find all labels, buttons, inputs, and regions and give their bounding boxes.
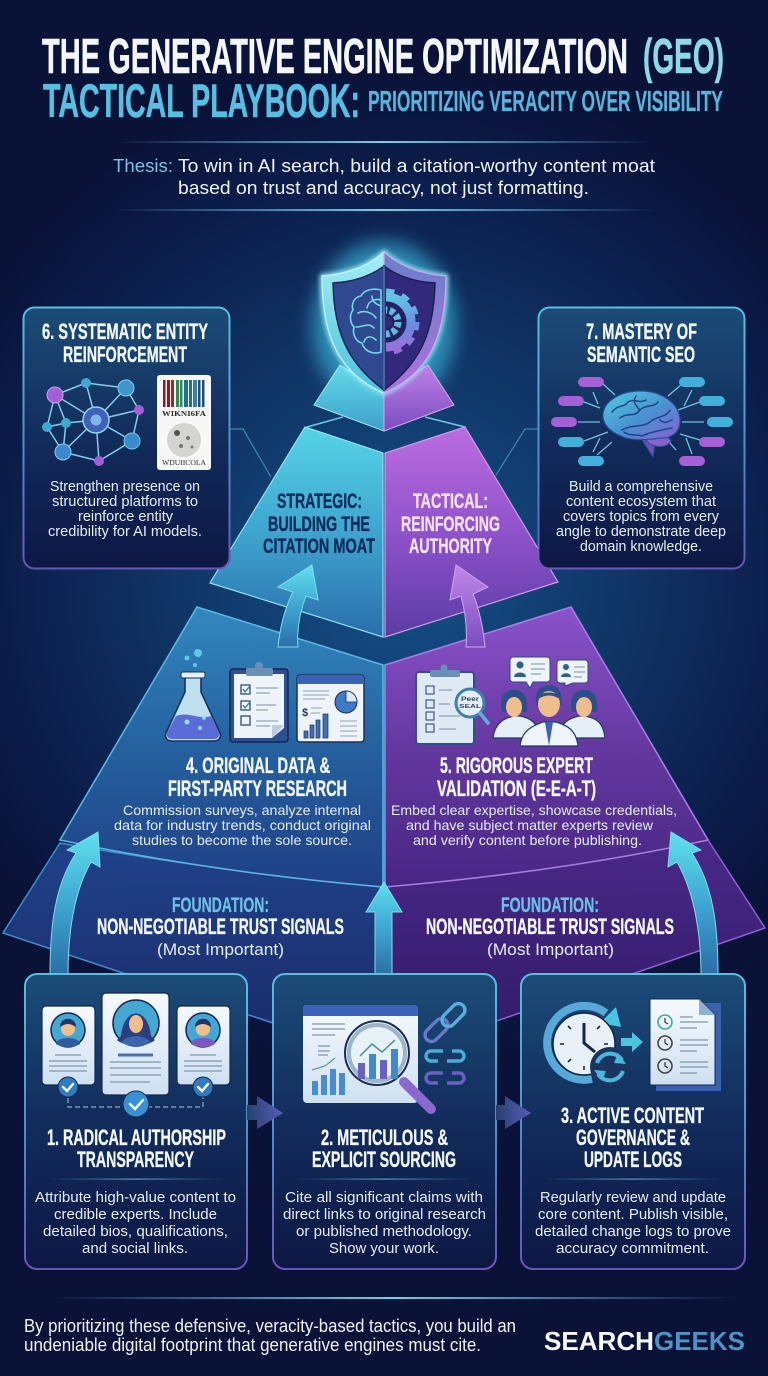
body text bbox=[48, 479, 202, 540]
body text: Show your work. bbox=[329, 1241, 439, 1257]
body text: credible experts. Include bbox=[54, 1207, 217, 1223]
tier label: strategic bbox=[263, 490, 375, 558]
thesis bbox=[113, 155, 655, 198]
icon: knowledge base card: WIKNI6FA bbox=[162, 410, 206, 418]
foundation label right: (Most Important) bbox=[487, 940, 614, 959]
icon group: original data bbox=[165, 649, 364, 742]
body text: credibility for AI models. bbox=[48, 524, 202, 540]
logo: SEARCH bbox=[544, 1326, 654, 1356]
middle tier bbox=[60, 607, 708, 887]
foundation label left: NON-NEGOTIABLE TRUST SIGNALS bbox=[97, 914, 344, 939]
icon: data dashboard bbox=[297, 675, 364, 742]
heading: 2. METICULOUS & bbox=[321, 1125, 448, 1150]
tactic 4 text: 4. ORIGINAL DATA & bbox=[186, 753, 330, 778]
tactic 4 text: FIRST-PARTY RESEARCH bbox=[168, 776, 347, 801]
body text: angle to demonstrate deep bbox=[556, 524, 726, 540]
icon: speech bubbles bbox=[510, 657, 588, 688]
foundation label left: (Most Important) bbox=[157, 940, 284, 959]
heading: 6. SYSTEMATIC ENTITY bbox=[42, 319, 208, 344]
body text: Cite all significant claims with bbox=[285, 1190, 483, 1206]
panel: tactic 3 bbox=[521, 974, 745, 1269]
tier label: strategic: BUILDING THE bbox=[268, 513, 370, 536]
icon group: expert validation bbox=[416, 657, 605, 746]
heading bbox=[561, 1103, 704, 1172]
tactic 5 text: 5. RIGOROUS EXPERT bbox=[440, 753, 593, 778]
icon: author bios bbox=[42, 993, 230, 1117]
arrow: strategic up bbox=[278, 565, 318, 647]
connector: card 7 to pyramid bbox=[496, 429, 538, 475]
heading: UPDATE LOGS bbox=[584, 1147, 682, 1172]
icon: peer review clipboard: SEAL bbox=[459, 704, 481, 710]
arrow: step 1 to step 2 bbox=[247, 1096, 283, 1129]
foundation label left bbox=[97, 894, 344, 959]
icon: clock and change log bbox=[547, 999, 721, 1091]
body text: Attribute high-value content to bbox=[35, 1190, 236, 1206]
body text: domain knowledge. bbox=[580, 539, 702, 555]
top tier: strategic bbox=[210, 427, 383, 637]
panel: tactic 6 bbox=[24, 308, 230, 568]
heading: REINFORCEMENT bbox=[63, 342, 187, 367]
body text: and social links. bbox=[82, 1241, 188, 1257]
icon: sourced data report with links bbox=[303, 1001, 468, 1109]
footer statement: By prioritizing these defensive, veracity-based tactics, you build an bbox=[24, 1316, 516, 1336]
thesis: based on trust and accuracy, not just formatting. bbox=[178, 177, 589, 198]
heading bbox=[47, 1125, 226, 1172]
tactic 5 text: and verify content before publishing. bbox=[413, 832, 642, 848]
body text bbox=[535, 1190, 731, 1257]
body text: content ecosystem that bbox=[566, 494, 716, 510]
body text: accuracy commitment. bbox=[556, 1241, 709, 1257]
heading: 7. MASTERY OF bbox=[586, 319, 697, 344]
icon: data dashboard: $ bbox=[302, 707, 308, 719]
tactic 4 text: studies to become the sole source. bbox=[132, 832, 352, 848]
body text: Strengthen presence on bbox=[50, 479, 200, 495]
icon: gear bbox=[386, 288, 420, 354]
tactic 5 text: VALIDATION (E-E-A-T) bbox=[437, 776, 596, 801]
logo bbox=[544, 1326, 745, 1356]
icon: peer review clipboard: Peer bbox=[461, 697, 480, 703]
foundation tier bbox=[3, 840, 765, 1060]
logo: GEEKS bbox=[654, 1326, 745, 1356]
icon: flask bbox=[165, 649, 221, 741]
thesis: Thesis: bbox=[113, 155, 173, 176]
arrow: step 2 to step 3 bbox=[496, 1096, 531, 1129]
body text: detailed change logs to prove bbox=[535, 1224, 731, 1240]
connector: card 6 to pyramid bbox=[230, 429, 271, 477]
icon: entity network bbox=[42, 378, 144, 466]
panel: tactic 7 bbox=[538, 308, 744, 568]
heading bbox=[42, 319, 208, 367]
tactic 5 text: and have subject matter experts review bbox=[406, 817, 654, 833]
foundation label right: FOUNDATION: bbox=[501, 894, 599, 917]
body text: or published methodology. bbox=[296, 1224, 472, 1240]
heading: TRANSPARENCY bbox=[77, 1147, 194, 1172]
body text bbox=[35, 1190, 236, 1257]
heading: EXPLICIT SOURCING bbox=[312, 1147, 456, 1172]
body text: core content. Publish visible, bbox=[538, 1207, 728, 1223]
heading bbox=[586, 319, 697, 367]
body text: reinforce entity bbox=[78, 509, 174, 525]
icon: brain mind map bbox=[551, 377, 733, 466]
body text: detailed bios, qualifications, bbox=[43, 1224, 228, 1240]
tactic 4 text: data for industry trends, conduct original bbox=[114, 817, 371, 833]
tactic 5 text bbox=[391, 753, 677, 848]
heading: GOVERNANCE & bbox=[576, 1125, 690, 1150]
arrow: right foundation up bbox=[668, 832, 718, 975]
tier label: tactical bbox=[401, 490, 500, 558]
icon: experts bbox=[493, 685, 605, 746]
shield pedestal bbox=[314, 365, 454, 431]
foundation label left: FOUNDATION: bbox=[172, 894, 269, 917]
tier label: tactical: AUTHORITY bbox=[409, 535, 492, 558]
tactic 4 text bbox=[114, 753, 371, 848]
icon: survey clipboard bbox=[230, 662, 288, 742]
arrow: center foundation up bbox=[366, 882, 402, 975]
icon: peer review clipboard bbox=[416, 664, 488, 744]
heading: 1. RADICAL AUTHORSHIP bbox=[47, 1125, 226, 1150]
arrow: tactical up bbox=[450, 565, 488, 647]
shield emblem bbox=[312, 241, 456, 431]
tactic 5 text: Embed clear expertise, showcase credentials, bbox=[391, 802, 677, 818]
body text bbox=[556, 479, 726, 555]
tier label: strategic: STRATEGIC: bbox=[277, 490, 362, 513]
icon: brain outline bbox=[350, 289, 381, 353]
body text: covers topics from every bbox=[563, 509, 720, 525]
heading: SEMANTIC SEO bbox=[587, 342, 695, 367]
tier label: strategic: CITATION MOAT bbox=[263, 535, 375, 558]
tier label: tactical: TACTICAL: bbox=[413, 490, 488, 513]
title bbox=[42, 30, 724, 127]
icon: knowledge base card: WDUIICOLA bbox=[162, 458, 207, 467]
tactic 4 text: Commission surveys, analyze internal bbox=[123, 802, 361, 818]
arrow: left foundation up bbox=[50, 832, 100, 975]
footer statement: undeniable digital footprint that generative engines must cite. bbox=[24, 1335, 481, 1355]
icon: knowledge base card bbox=[157, 375, 211, 470]
foundation label right bbox=[426, 894, 674, 959]
body text: direct links to original research bbox=[283, 1207, 486, 1223]
body text: Build a comprehensive bbox=[569, 479, 713, 495]
title: TACTICAL PLAYBOOK: bbox=[43, 74, 360, 127]
footer statement bbox=[24, 1316, 516, 1355]
thesis: To win in AI search, build a citation-worthy content moat bbox=[178, 155, 655, 176]
body text bbox=[283, 1190, 486, 1257]
tier label: tactical: REINFORCING bbox=[401, 513, 500, 536]
top tier: tactical bbox=[385, 427, 558, 637]
heading bbox=[312, 1125, 456, 1172]
body text: structured platforms to bbox=[52, 494, 198, 510]
pyramid bbox=[3, 417, 765, 1060]
panel: tactic 2 bbox=[273, 974, 496, 1269]
panel: tactic 1 bbox=[25, 974, 247, 1269]
body text: Regularly review and update bbox=[540, 1190, 726, 1206]
